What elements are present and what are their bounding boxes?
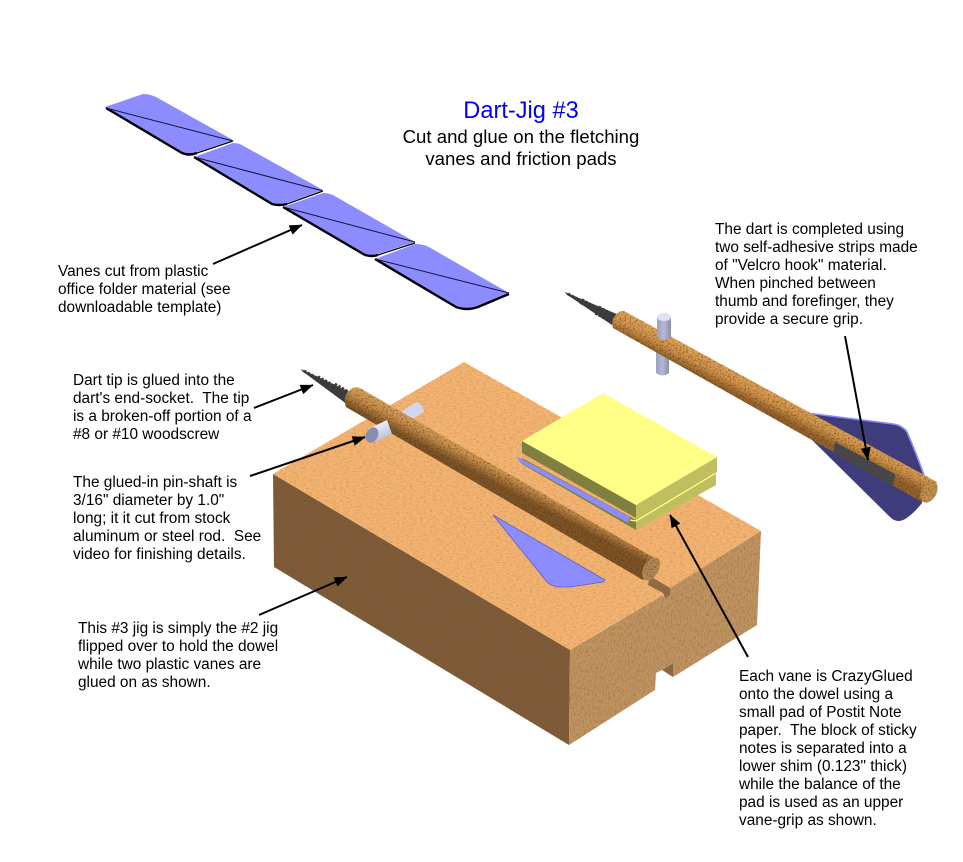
block top face: [273, 362, 761, 650]
lower shim right face: [636, 472, 716, 530]
text: vanes note: downloadable template): [58, 299, 221, 316]
vane clamped in pad: [517, 458, 630, 523]
woodscrew tip on jig: [301, 369, 354, 405]
text: dart tip note: Dart tip is glued into the: [73, 372, 235, 389]
completed dart: [565, 292, 941, 521]
vane highlight edge: [807, 413, 925, 478]
text: dart tip note: [73, 372, 252, 443]
text: crazyglue note: [738, 668, 917, 829]
text: crazyglue note: lower shim (0.123" thick): [739, 758, 907, 775]
flat vane on block: [493, 515, 605, 587]
text: velcro note: thumb and forefinger, they: [715, 293, 894, 310]
dart shaft end cap: [917, 478, 941, 506]
gap line between pads: [630, 473, 716, 521]
text: vanes note: office folder material (see: [58, 281, 231, 298]
dark vane behind shaft: [807, 413, 925, 521]
upper pad right face: [636, 457, 717, 518]
arrow: to jig block: [259, 577, 347, 615]
text: pin shaft note: [73, 474, 261, 563]
text: dart tip note: #8 or #10 woodscrew: [73, 426, 220, 443]
text: jig note: glued on as shown.: [78, 674, 211, 691]
vane 1: [105, 94, 233, 154]
text: crazyglue note: notes is separated into a: [739, 740, 907, 757]
dart shaft: [612, 311, 937, 502]
vane 2: [194, 143, 323, 205]
text: jig note: while two plastic vanes are: [77, 656, 261, 673]
dowel slot: [648, 576, 670, 599]
upper pad left face: [522, 441, 636, 518]
text: crazyglue note: pad is used as an upper: [739, 794, 903, 811]
text: pin shaft note: The glued-in pin-shaft is: [73, 474, 238, 491]
arrow: to sticky pad: [670, 515, 748, 657]
title: vanes and friction pads: [425, 148, 617, 169]
text: velcro note: When pinched between: [715, 275, 876, 292]
text: velcro note: The dart is completed using: [715, 221, 904, 238]
text: jig note: flipped over to hold the dowel: [78, 638, 278, 655]
dart on jig: front pin: [363, 420, 392, 445]
text: velcro note: [715, 221, 918, 328]
title: Dart-Jig #3: [463, 98, 579, 124]
vane strip: template of four plastic vanes: [105, 94, 509, 309]
text: jig note: This #3 jig is simply the #2 jig: [78, 620, 278, 637]
pin shaft upper: [657, 313, 671, 340]
title: [403, 98, 639, 169]
text: dart tip note: dart's end-socket. The tip: [73, 390, 249, 407]
arrow: to velcro grip: [845, 336, 868, 460]
text: jig note: [77, 620, 278, 691]
title: Cut and glue on the fletching: [403, 126, 639, 147]
velcro grip strip: [833, 442, 895, 487]
lower shim left face: [522, 458, 636, 530]
upper pad top: [522, 393, 717, 505]
text: vanes note: [58, 263, 231, 316]
text: crazyglue note: Each vane is CrazyGlued: [739, 668, 913, 685]
arrow: to vanes: [213, 225, 302, 264]
woodscrew tip: [565, 292, 619, 325]
text: crazyglue note: while the balance of the: [738, 776, 901, 793]
text: pin shaft note: 3/16" diameter by 1.0": [73, 492, 224, 509]
arrow: to screw tip: [254, 385, 313, 408]
text: velcro note: two self-adhesive strips made: [715, 239, 918, 256]
vane 3: [283, 193, 415, 256]
text: velcro note: provide a secure grip.: [715, 311, 863, 328]
vane 4: [375, 244, 509, 309]
notch inner wall: [662, 663, 673, 677]
text: crazyglue note: vane-grip as shown.: [739, 812, 877, 829]
sticky-note pad: [517, 393, 717, 530]
text: crazyglue note: onto the dowel using a: [739, 686, 893, 703]
text: dart tip note: is a broken-off portion of a: [73, 408, 252, 425]
text: crazyglue note: paper. The block of sticky: [739, 722, 917, 739]
text: pin shaft note: video for finishing details.: [73, 546, 246, 563]
arrow: to pin shaft: [250, 437, 365, 476]
block right face with notches: [569, 531, 761, 745]
dowel end cap: [638, 554, 664, 584]
text: pin shaft note: long; it it cut from stock: [73, 510, 231, 527]
pin shaft lower: [656, 340, 669, 376]
jig block: [273, 362, 761, 745]
dowel on jig: [345, 387, 664, 584]
text: crazyglue note: small pad of Postit Note: [739, 704, 902, 721]
text: velcro note: of "Velcro hook" material.: [715, 257, 887, 274]
block left face: [273, 474, 570, 745]
text: pin shaft note: aluminum or steel rod. See: [73, 528, 261, 545]
text: vanes note: Vanes cut from plastic: [58, 263, 209, 280]
dart on jig: rear pin: [398, 402, 424, 423]
